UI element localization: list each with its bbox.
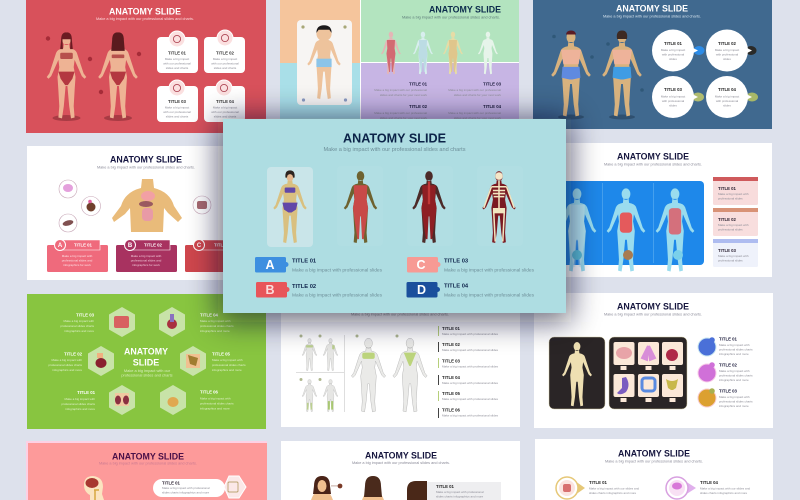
text: title 05: infographics and more [212,368,242,372]
card: title 01: professional slides [718,196,743,200]
item: title 01: TITLE 01 [589,480,608,485]
figure: woman front [311,476,342,500]
item: title 03 [698,388,753,408]
text: title 01 [61,390,96,411]
figure: skeleton [477,166,523,246]
text: title 01: Make a big impact with our professional [374,88,427,92]
board: organ cards [609,337,687,409]
heading: red slide: ANATOMY SLIDE [109,6,181,18]
text: title 02: Make a big impact with our professional [374,111,427,115]
heading: organ board slide: ANATOMY SLIDE [617,302,689,312]
board: body silhouette [549,337,605,409]
panel: woman slide [281,441,520,500]
text: title 03 [448,82,502,97]
card: title 03: professional slides [718,258,743,262]
card: title 03: slides and charts [166,114,189,118]
heading: main slide: ANATOMY SLIDE [343,132,446,146]
callout: title 01: slides [669,57,677,61]
panel: muscle chart slide [281,300,520,427]
text: title 03: infographics and more [64,329,94,333]
figure: skeleton x-ray [558,188,596,271]
callout: title 03: TITLE 03 [664,87,683,92]
heading: colour block slide: ANATOMY SLIDE [429,4,501,16]
figure: torso with organs [112,179,182,232]
text: title 01: Make a big impact with [64,397,95,401]
list: title 03 [438,358,499,368]
list: title 06: Make a big impact with professional slides [442,414,499,418]
legend: B title 02: B [265,283,275,297]
item: title 04: slides charts infographics and more [700,491,748,495]
subtitle: main slide: Make a big impact with our professional slides and charts [324,147,466,153]
list: title 01: TITLE 01 [442,326,461,331]
figure: woman back [98,32,141,121]
callout: title 01: slides charts infographics and more [436,494,484,498]
heading: pink slide: ANATOMY SLIDE [112,452,184,462]
text: title 04: infographics and more [200,329,230,333]
heading: x-ray slide: ANATOMY SLIDE [617,152,689,162]
text: title 02 [374,104,428,120]
card: title 03: Make a big impact [165,106,189,110]
text: title 05 [212,352,246,372]
text: title 02: professional slides charts [48,363,82,367]
icon: intestine [642,378,655,391]
list: title 06: TITLE 06 [442,408,461,412]
list: title 02 [438,342,499,352]
card: A: infographics for work [63,263,91,267]
tabs [692,46,758,102]
chart panel: x-ray bodies [540,181,704,271]
card: title 02: Make a big impact [213,57,237,61]
card: title 03: Make a big impact with [718,254,749,258]
item: title 04: Make a big impact with our slides and [700,486,750,490]
text: title 03: TITLE 03 [483,82,502,86]
callout: title 01: Make a big impact with professional [162,486,210,490]
callout: title 01 [407,481,501,500]
text: title 01: slides and charts for your next work [380,93,427,97]
subtitle: hexagon slide [121,368,173,378]
icon: liver [59,214,77,232]
icon: hexagon pancreas [180,346,206,376]
callout: title 01: TITLE 01 [436,484,455,489]
subtitle: muscle slide: Make a big impact with our professional slides and charts. [351,312,449,316]
figure: large muscle back [393,334,427,412]
card: title 02 [713,208,758,236]
card: title 02: TITLE 02 [216,50,235,56]
heading: hexagon slide: ANATOMY [124,346,168,356]
text: title 04: TITLE 04 [200,312,219,318]
figure: boy card [297,20,352,105]
subtitle: hexagon slide: Make a big impact with our [124,368,171,373]
card: title 01: Make a big impact with [718,192,749,196]
panel: ring icons slide [535,439,773,500]
item: title 01 [698,336,753,356]
icon: lungs [642,346,655,360]
figure: organs x-ray [607,188,645,271]
callout: title 01 [652,30,698,72]
text: title 04 [200,312,234,333]
card: title 01 [713,177,758,205]
card: C: TITLE 03 [214,242,233,248]
card: title 04: Make a big impact [213,106,237,110]
text: title 06: Make a big impact with [200,396,231,400]
callout: title 03: Make a big impact [661,94,685,98]
callout: title 04: slides [723,104,731,108]
icon: bladder [666,379,678,390]
text: title 03: professional slides charts [60,324,94,328]
list: title 06 [438,408,499,418]
card: B [116,240,177,272]
card: B: infographics for work [132,263,160,267]
icon: head profile [84,476,104,500]
legend: D title 04: D [417,283,426,297]
figure: small shoulders pair [300,334,338,371]
card: A: Make a big impact with [62,254,93,258]
heading: ring slide: ANATOMY SLIDE [618,448,690,460]
callout: title 01: Make a big impact [661,48,685,52]
callout: title 03 [652,76,698,118]
text: title 04: Make a big impact with [200,319,231,323]
list: title 01 [438,326,499,336]
card: A: professional slides and [62,258,93,262]
icon: brain [59,180,77,198]
callout: title 01: Make a big impact with professional [436,490,484,494]
text: title 02: slides and charts for your next work [380,116,427,120]
figure: digestive [443,32,463,74]
heading: navy slide: ANATOMY SLIDE [616,4,688,14]
icon: brain [616,347,632,359]
card: C [185,240,246,272]
icon: intestine [193,196,211,214]
callout: title 01: with professional [662,52,684,56]
card: title 04: with our professional [211,110,239,114]
item: title 01: TITLE 01 [719,336,738,342]
card: title 01: Make a big impact [165,57,189,61]
item: title 01: infographics and more [719,352,749,356]
text: title 06 [200,390,234,410]
legend: A title 01 [255,257,382,272]
item: title 01 [556,477,639,499]
callout: title 01: TITLE 01 [664,41,683,46]
text: title 03: slides and charts for your next work [454,93,501,97]
legend: A title 01: A [265,258,275,272]
item: title 02: TITLE 02 [719,362,738,368]
list: title 05: Make a big impact with professional slides [442,397,499,401]
callout: title 01 [153,476,246,498]
text: title 05: professional slides charts [212,363,246,367]
figure: man front [551,30,594,120]
legend: C title 03: C [416,258,426,272]
panel: green hexagon slide [27,294,266,429]
item: title 01: Make a big impact with our slides and [589,486,639,490]
list: title 04 [438,375,499,385]
card: title 04: slides and charts [214,114,237,118]
callout: title 02: Make a big impact [715,48,739,52]
heading: woman slide: ANATOMY SLIDE [365,450,437,462]
callout: title 01: slides charts infographics and more [162,490,210,494]
item: title 03: infographics and more [719,404,749,408]
figure: lungs [413,32,433,74]
list: title 03: TITLE 03 [442,358,461,364]
callout: title 02: TITLE 02 [718,41,737,46]
shadow behind main slide [218,118,571,322]
callout: title 04 [706,76,752,118]
legend: D title 04: TITLE 04 [444,284,469,290]
callout: title 03: with professional [662,99,684,103]
subtitle: pink slide: Make a big impact with our professional slides and charts. [99,460,197,466]
card: title 01: TITLE 01 [168,50,187,56]
list: title 04: TITLE 04 [442,375,461,380]
text: title 01: professional slides charts [61,402,95,406]
callout: title 02: slides [723,57,731,61]
card: A: TITLE 01 [74,242,93,248]
callout: title 01: TITLE 01 [162,480,181,486]
figure: man back [602,30,644,120]
panel: organ board slide [534,293,773,428]
subtitle: x-ray slide: Make a big impact with our professional slides and charts. [604,162,702,166]
legend: A title 01: Make a big impact with professional slides [292,268,382,272]
icon: stomach [617,377,628,394]
text: title 01: infographics and more [65,407,95,411]
icon: hexagon kidneys [109,385,135,415]
figure: muscles [337,166,383,246]
card: B: professional slides and [131,258,162,262]
subtitle: ring slide: Make a big impact with our professional slides and charts. [605,458,703,464]
item: title 04: TITLE 04 [700,480,719,485]
legend: B title 02: Make a big impact with professional slides [292,292,382,298]
card: title 02: TITLE 02 [718,217,737,222]
callout: title 02: with professional [716,52,738,56]
figure: large muscle front [351,334,386,412]
icon: hexagon heart [159,307,185,337]
card: C: C [197,243,202,249]
callout: title 02 [706,30,752,72]
list: title 04: Make a big impact with professional slides [442,381,499,385]
panel: x-ray slide [540,143,772,277]
card: title 04: TITLE 04 [216,99,235,104]
list: title 02: Make a big impact with professional slides [442,348,499,352]
text: title 02 [48,352,83,372]
heading: organs slide: ANATOMY SLIDE [110,154,182,166]
icon: hexagon liver [88,346,114,376]
callout: title 04: with professional [716,99,738,103]
item: title 01: professional slides charts [719,348,753,352]
legend: A title 01: TITLE 01 [292,258,317,264]
text: title 04 [448,104,502,120]
text: title 06: TITLE 06 [200,390,219,394]
icon: heart [666,349,678,361]
panel: main teal slide [223,119,566,313]
card: title 03: TITLE 03 [718,248,737,253]
text: title 06: infographics and more [200,406,230,410]
text: title 05: TITLE 05 [212,352,231,356]
item: title 04 [666,477,750,499]
card: A: A [58,243,63,249]
text: title 01: TITLE 01 [77,390,96,395]
panel: pink slide [26,441,267,500]
subtitle: organs slide: Make a big impact with our professional slides and charts. [97,164,195,170]
figure: woman back [362,476,384,500]
legend: C title 03: TITLE 03 [444,258,469,264]
item: title 03: professional slides charts [719,400,753,404]
item: title 03: Make a big impact with [719,395,750,399]
icon: hexagon stomach [109,307,135,337]
callout: title 03: slides [669,104,677,108]
text: title 04: slides and charts for your next work [454,116,501,120]
text: title 04: TITLE 04 [483,104,502,109]
card: title 02: professional slides [718,228,743,232]
heading line 2: SLIDE [133,358,159,368]
list: title 02: TITLE 02 [442,342,461,347]
card: title 02: slides and charts [214,66,237,70]
text: title 01 [374,82,428,97]
text: title 03 [60,312,95,333]
card: title 01: TITLE 01 [718,186,737,191]
legend: B title 02: TITLE 02 [292,284,316,290]
subtitle: red slide: Make a big impact with our professional slides and charts. [96,16,194,21]
card: title 01 [157,31,198,73]
panel: white organs slide [27,146,267,280]
text: title 02: TITLE 02 [409,104,428,109]
item: title 01: Make a big impact with [719,343,750,347]
list: title 03: Make a big impact with professional slides [442,364,499,368]
legend: D title 04: Make a big impact with professional slides [444,292,534,298]
item: title 02 [698,362,753,382]
figure: circulatory system [407,166,453,246]
text: title 05: Make a big impact with [212,358,243,362]
text: title 04: Make a big impact with our professional [448,111,501,115]
icon: hexagon bladder [160,385,186,415]
text: title 02: Make a big impact with [51,358,82,362]
legend: C title 03 [407,257,534,272]
card: title 01: with our professional [163,62,191,66]
text: title 02: infographics and more [52,368,82,372]
figure: outline [478,32,498,74]
item: title 01: slides charts infographics and more [589,491,637,495]
panel: colour block slide [280,0,519,120]
panel: navy slide [533,0,772,129]
icon: heart [82,196,100,216]
card: title 03: with our professional [163,110,191,114]
card: title 02: Make a big impact with [718,223,749,227]
text: title 01: TITLE 01 [409,82,428,86]
card: B: Make a big impact with [131,254,162,258]
card: A [47,240,108,272]
text: title 03: TITLE 03 [76,312,95,318]
subtitle: hexagon slide: professional slides and charts [121,372,173,378]
card: title 04 [204,80,245,122]
card: title 01: slides and charts [166,66,189,70]
callout: title 04: Make a big impact [715,94,739,98]
list: title 01: Make a big impact with professional slides [442,332,499,336]
card: title 02 [204,30,245,73]
figure: woman front [46,32,92,121]
card: title 03: TITLE 03 [168,99,187,104]
list: title 05 [438,391,499,401]
subtitle: navy slide: Make a big impact with our professional slides and charts. [603,14,701,18]
item: title 02: professional slides charts [719,374,753,378]
card: title 03 [713,239,758,267]
item: title 02: Make a big impact with [719,369,750,373]
callout: title 04: TITLE 04 [718,87,737,92]
figure: digestive x-ray [656,188,694,271]
text: title 04: professional slides charts [200,324,234,328]
subtitle: organ board slide: Make a big impact with our professional slides and charts. [604,312,702,316]
legend: D title 04 [406,282,534,298]
item: title 02: infographics and more [719,378,749,382]
text: title 06: professional slides charts [200,402,234,406]
panel: red slide [26,0,266,133]
text: title 03: Make a big impact with our professional [448,88,501,92]
card: title 02: with our professional [211,62,239,66]
figure: circulatory [381,32,401,74]
legend: B title 02 [256,282,382,298]
list: title 05: TITLE 05 [442,391,461,396]
figure: woman in swimwear [267,167,313,247]
card: B: B [128,243,133,249]
text: title 02: TITLE 02 [64,352,83,356]
text: title 03: Make a big impact with [63,319,94,323]
subtitle: colour block slide: Make a big impact with our professional slides and charts. [402,14,500,20]
card: B: TITLE 02 [144,242,163,248]
item: title 03: TITLE 03 [719,388,738,394]
figure: small legs pair [300,378,338,412]
card: title 03 [157,80,198,122]
subtitle: woman slide: Make a big impact with our professional slides and charts. [352,460,450,465]
legend: C title 03: Make a big impact with professional slides [444,268,534,272]
